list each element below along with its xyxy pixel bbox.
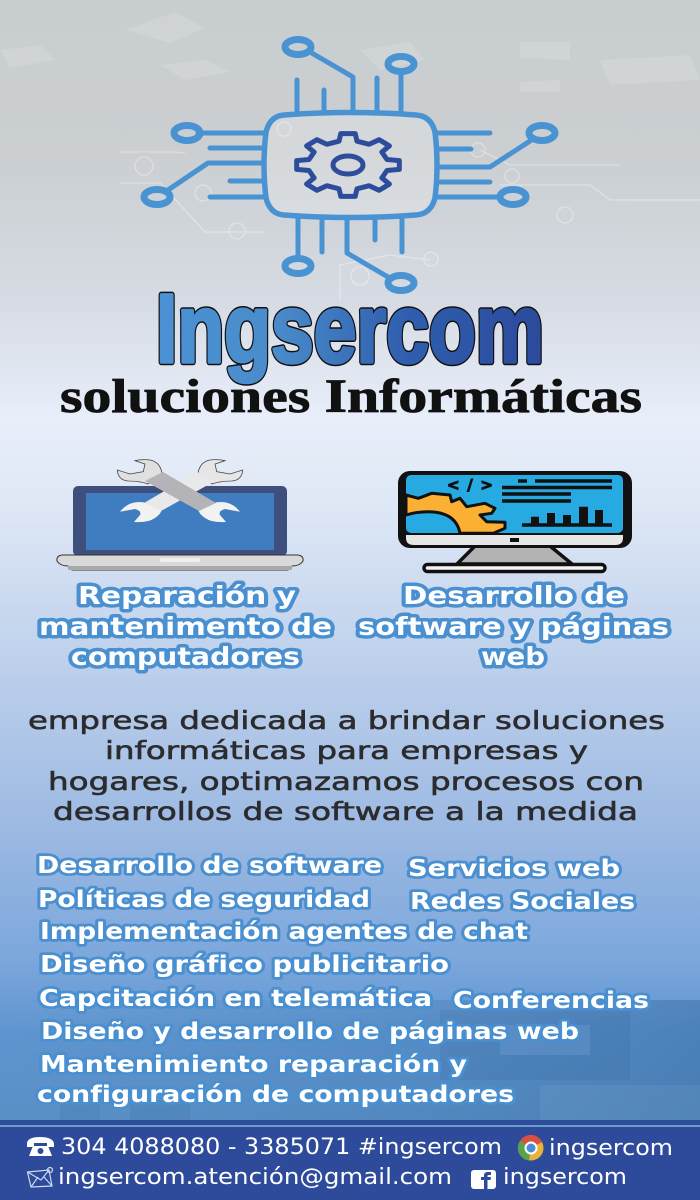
heading: repair: computadores — [71, 642, 300, 671]
services list: Diseño y desarrollo de páginas web — [41, 1019, 579, 1045]
web name: ingsercom — [549, 1136, 673, 1161]
chip pins — [144, 40, 555, 290]
wrench: back — [120, 460, 243, 522]
email: ingsercom.atención@gmail.com — [58, 1165, 452, 1190]
description paragraph: empresa dedicada a brindar soluciones — [28, 706, 665, 735]
bar chart — [531, 507, 603, 525]
heading: repair: Reparación y — [78, 581, 296, 610]
laptop base — [57, 555, 303, 570]
gear icon — [297, 134, 399, 196]
code symbol: </> — [447, 476, 493, 494]
heading: development: software y páginas — [358, 612, 669, 641]
gear on screen — [406, 493, 505, 533]
icon: facebook — [471, 1170, 496, 1189]
logo: circuit chip — [144, 40, 555, 290]
services list: Redes Sociales — [410, 889, 635, 915]
heading: development: web — [481, 642, 545, 671]
services list: Mantenimiento reparación y — [40, 1052, 467, 1078]
icon: laptop with wrenches — [57, 460, 303, 570]
subtitle: soluciones Informáticas — [60, 370, 642, 423]
description paragraph — [28, 706, 665, 826]
heading: development — [358, 581, 669, 671]
description paragraph: hogares, optimazamos procesos con — [48, 767, 644, 796]
services list — [37, 853, 649, 1108]
services list: Diseño gráfico publicitario — [40, 952, 449, 978]
facebook name: ingsercom — [503, 1165, 627, 1190]
services list: Servicios web — [408, 856, 620, 882]
services list: configuración de computadores — [37, 1082, 514, 1108]
services list: Políticas de seguridad — [38, 887, 370, 913]
title: Ingsercom: Ingsercom — [156, 274, 544, 383]
description paragraph: informáticas para empresas y — [105, 736, 588, 765]
wrench: front — [117, 460, 240, 522]
services list: Conferencias — [453, 988, 649, 1014]
icon: envelope — [28, 1168, 52, 1187]
services list: Capcitación en telemática — [39, 986, 432, 1012]
icon: chrome — [518, 1135, 544, 1160]
footer band — [0, 1120, 700, 1200]
description paragraph: desarrollos de software a la medida — [53, 797, 638, 826]
services list: Implementación agentes de chat — [40, 919, 528, 945]
title: Ingsercom: Ingsercom — [156, 274, 544, 383]
chip body — [264, 112, 437, 218]
monitor frame — [398, 471, 632, 548]
screen text lines — [502, 481, 612, 525]
services list: Desarrollo de software — [37, 853, 382, 879]
icon: monitor with code and gear — [398, 471, 632, 572]
phone and hashtag: 304 4088080 - 3385071 #ingsercom — [61, 1135, 502, 1160]
heading: repair: mantenimento de — [39, 612, 332, 641]
monitor stand — [457, 546, 572, 564]
icon: telephone — [27, 1137, 54, 1156]
heading: repair — [39, 581, 332, 671]
heading: development: Desarrollo de — [403, 581, 625, 610]
laptop screen — [73, 486, 287, 556]
